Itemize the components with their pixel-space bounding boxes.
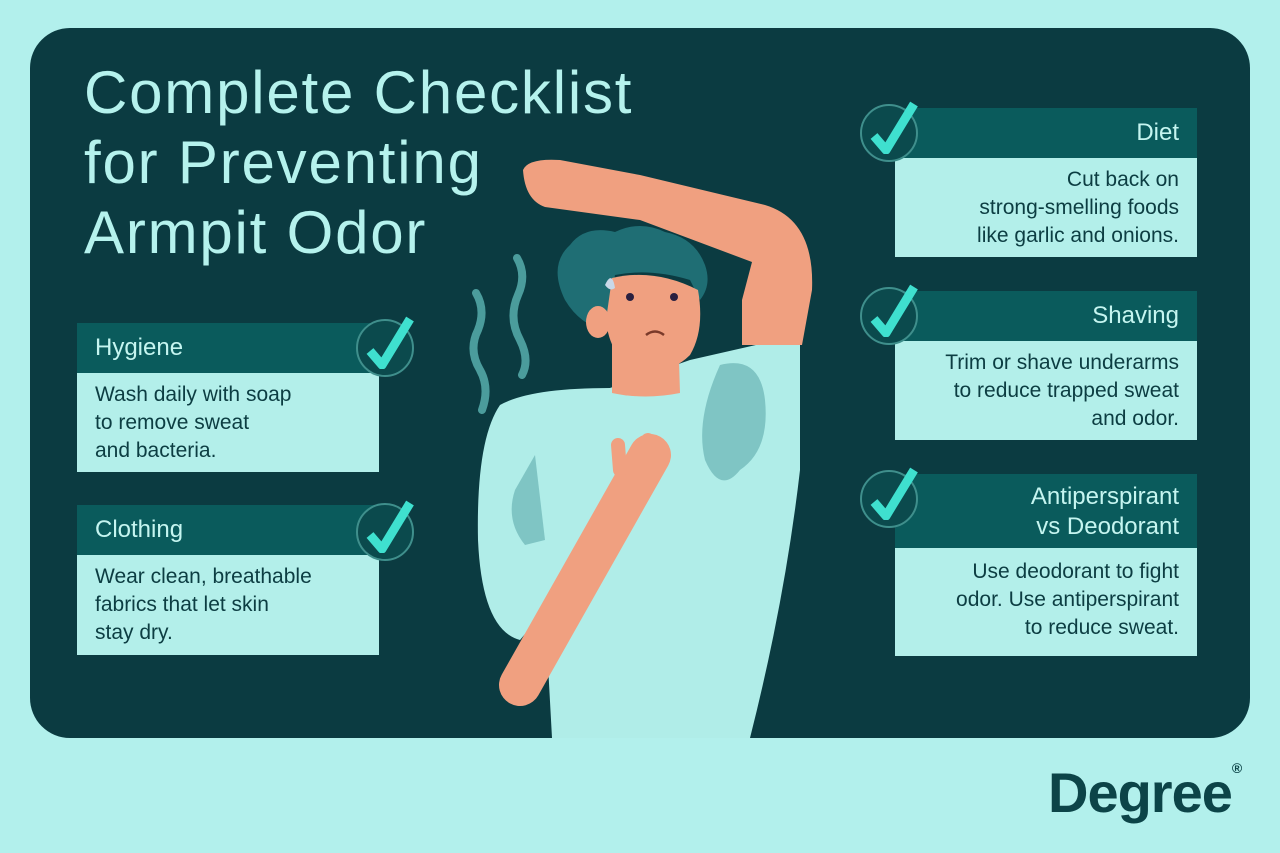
card: Hygiene	[77, 323, 379, 472]
card: Antiperspirant vs Deodorant: Use deodorant to fight	[972, 560, 1179, 583]
card: Clothing: fabrics that let skin	[95, 593, 269, 616]
neck	[612, 330, 680, 396]
card: Shaving: and odor.	[1091, 407, 1179, 430]
pointing arm	[520, 455, 650, 685]
card: Hygiene: Hygiene	[95, 334, 183, 361]
card: Shaving: Trim or shave underarms	[945, 351, 1179, 374]
card: Diet: like garlic and onions.	[977, 224, 1179, 247]
card: Diet: Diet	[1136, 119, 1179, 146]
card: Hygiene: Wash daily with soap	[95, 383, 291, 406]
card: Clothing: Wear clean, breathable	[95, 565, 312, 588]
card: Hygiene: and bacteria.	[95, 439, 216, 462]
card: Antiperspirant vs Deodorant: odor. Use antiperspirant	[956, 588, 1179, 611]
title: for Preventing	[84, 129, 483, 196]
card: Diet	[895, 108, 1197, 257]
card: Antiperspirant vs Deodorant: Antiperspirant	[1031, 483, 1179, 510]
icon: check Clothing	[356, 503, 414, 561]
title: Armpit Odor	[84, 199, 427, 266]
card: Antiperspirant vs Deodorant	[895, 474, 1197, 656]
card: Antiperspirant vs Deodorant: to reduce sweat.	[1025, 616, 1179, 639]
face	[626, 293, 634, 301]
odor waves	[473, 258, 526, 410]
card: Shaving	[895, 291, 1197, 440]
head	[606, 275, 700, 371]
card: Antiperspirant vs Deodorant: vs Deodorant	[1036, 513, 1179, 540]
shirt	[478, 335, 800, 738]
card: Diet: Cut back on	[1067, 168, 1179, 191]
card: Diet: strong-smelling foods	[979, 196, 1179, 219]
sweat patches	[702, 363, 766, 480]
icon: check Hygiene	[356, 319, 414, 377]
hair	[558, 226, 708, 330]
icon: check Shaving	[860, 287, 918, 345]
raised arm	[523, 160, 812, 345]
title: Complete Checklist	[84, 59, 633, 126]
icon: check Diet	[860, 104, 918, 162]
ear	[586, 306, 610, 338]
panel: dark background	[30, 28, 1250, 738]
title	[84, 59, 633, 266]
card: Clothing: stay dry.	[95, 621, 173, 644]
icon: check Antiperspirant	[860, 470, 918, 528]
card: Clothing	[77, 505, 379, 655]
card: Shaving: to reduce trapped sweat	[954, 379, 1179, 402]
card: Clothing: Clothing	[95, 516, 183, 543]
logo: Degree: Degree®	[1048, 760, 1241, 824]
card: Shaving: Shaving	[1092, 302, 1179, 329]
card: Hygiene: to remove sweat	[95, 411, 249, 434]
